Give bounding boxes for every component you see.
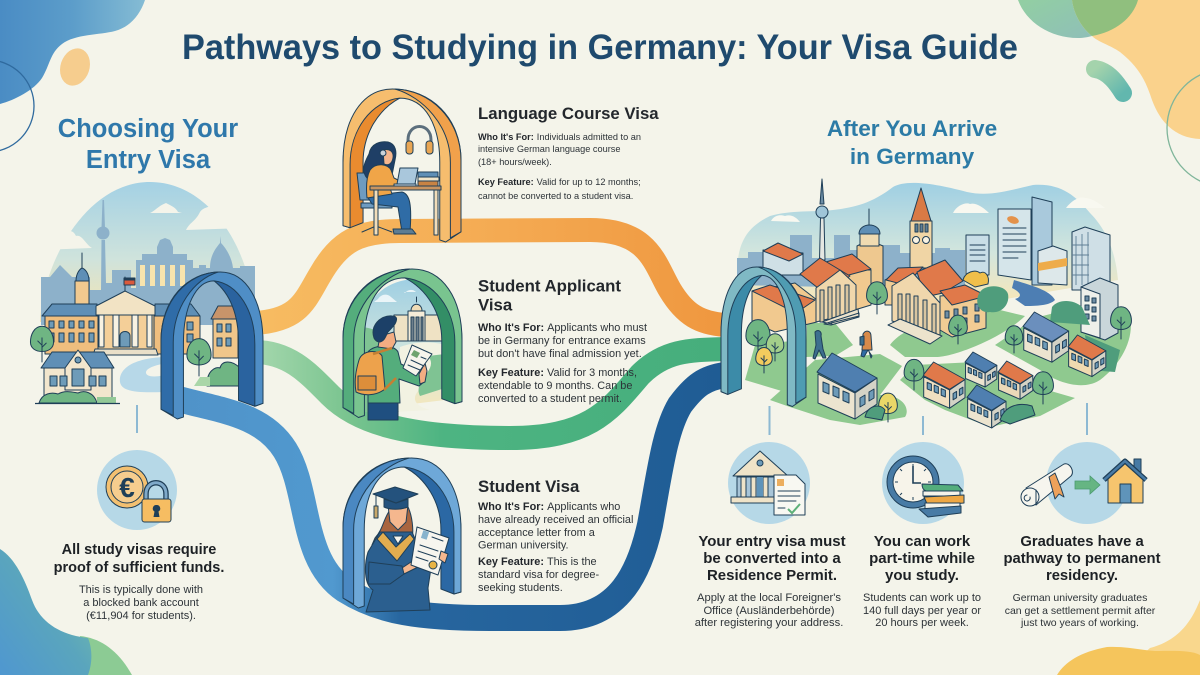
front school	[44, 367, 112, 402]
text: residence permit: be converted into a	[703, 550, 841, 567]
text: Student Applicant Visa: Who It's For:	[478, 322, 544, 334]
text: Student Visa	[478, 477, 633, 594]
arch: green	[343, 269, 462, 418]
text: permanent residency: residency.	[1046, 568, 1118, 584]
icon: euro coin and padlock	[97, 450, 177, 530]
illustration: German city campus	[737, 179, 1131, 428]
skyline silhouette	[41, 236, 255, 325]
illustration: Berlin skyline and campus	[30, 182, 256, 404]
text: Student Visa: German university.	[478, 540, 569, 552]
text: part-time work: You can work	[874, 533, 971, 550]
text: proof of funds: All study visas require	[62, 542, 216, 558]
river	[120, 357, 172, 392]
text: Student Visa: Who It's For:	[478, 501, 544, 513]
books	[418, 172, 438, 177]
text: residence permit: Office (Ausländerbehörde)	[703, 605, 835, 617]
right wing and small house	[187, 322, 193, 342]
arch: teal entry to Germany	[721, 267, 806, 406]
main university building	[45, 316, 200, 354]
text: proof of funds: This is typically done with	[79, 584, 203, 596]
connector: funds	[136, 405, 138, 433]
laptop	[397, 168, 418, 184]
trees	[30, 326, 54, 362]
text: Language Course Visa: Key Feature:	[478, 177, 534, 187]
text: residence permit: after registering your address.	[695, 617, 843, 629]
text: part-time work: 20 hours per week.	[875, 617, 969, 629]
green lawns	[770, 305, 1131, 427]
text: residence permit: Your entry visa must	[698, 533, 846, 550]
text: Student Visa: Key Feature:	[478, 556, 544, 568]
trees	[746, 320, 770, 357]
text: Language Course Visa: cannot be converted to a student visa.	[478, 191, 633, 201]
text: Student Applicant Visa: Valid for 3 months,	[547, 367, 637, 379]
text: Student Applicant Visa: Key Feature:	[478, 367, 544, 379]
text: permanent residency: can get a settlement permit after	[1005, 605, 1156, 617]
icon: euro coin and padlock: €	[119, 472, 135, 503]
right university	[885, 270, 905, 305]
TV tower	[820, 218, 825, 260]
text: permanent residency: German university graduates	[1013, 592, 1147, 604]
distant silhouettes	[737, 235, 965, 290]
text: Student Visa: standard visa for degree-	[478, 569, 599, 581]
decoration: bottom-right blob	[1057, 600, 1200, 675]
text: Student Applicant Visa: Applicants who must	[547, 322, 647, 334]
text: Student Visa: This is the	[547, 556, 597, 568]
text: part-time work: 140 full days per year or	[863, 605, 981, 617]
heading: Choosing Your Entry Visa: Entry Visa	[86, 146, 211, 174]
arch: entry arch blue	[161, 272, 263, 419]
domed tower	[857, 240, 883, 290]
text: residence permit	[695, 533, 846, 629]
text: Language Course Visa: Language Course Visa	[478, 104, 659, 123]
path: blue route	[165, 375, 725, 618]
text: Student Applicant Visa: Visa	[478, 296, 513, 314]
text: part-time work: Students can work up to	[863, 592, 981, 604]
text: Student Applicant Visa: but don't have final admission yet.	[478, 348, 642, 360]
person	[364, 142, 396, 178]
yellow shrub and bushes	[963, 271, 988, 287]
arch: orange	[343, 89, 461, 242]
decoration: top-right blobs	[1018, 0, 1200, 187]
icon: clock and books	[882, 442, 964, 524]
path: green route	[255, 349, 725, 438]
connectors: right column	[768, 403, 1088, 435]
illustration: graduate with certificate	[365, 487, 449, 612]
text: proof of funds: a blocked bank account	[83, 597, 199, 609]
text: Language Course Visa: (18+ hours/week).	[478, 157, 552, 167]
text: residence permit: Apply at the local Foreigner's	[697, 592, 841, 604]
text: Student Applicant Visa	[478, 276, 647, 405]
text: Language Course Visa	[478, 104, 659, 201]
text: Language Course Visa: Who It's For:	[478, 132, 534, 142]
headphones	[408, 126, 431, 146]
text: Student Applicant Visa: extendable to 9 months. Can be	[478, 380, 632, 392]
chair	[357, 173, 392, 208]
text: permanent residency: just two years of working.	[1020, 617, 1139, 629]
text: Student Applicant Visa: converted to a student permit.	[478, 393, 622, 405]
illustration: language student at desk	[357, 126, 441, 235]
icon: diploma arrow house	[1021, 442, 1146, 524]
text: permanent residency	[1003, 534, 1161, 629]
paper	[403, 345, 432, 376]
heading: After You Arrive in Germany: in Germany	[850, 144, 975, 169]
illustration: applicant with backpack	[355, 316, 432, 420]
text: Language Course Visa: intensive German language course	[478, 144, 620, 154]
desk	[370, 186, 441, 190]
title: Pathways to Studying in Germany: Your Visa Guide	[182, 28, 1018, 67]
text: permanent residency: pathway to permanent	[1003, 551, 1161, 567]
text: Student Visa: seeking students.	[478, 582, 563, 594]
icon: bank and document	[728, 442, 810, 524]
path: orange route	[255, 230, 725, 325]
walkers	[813, 331, 826, 359]
scene: view through green arch	[362, 279, 445, 412]
text: part-time work: part-time while	[869, 550, 975, 567]
left university	[763, 250, 803, 275]
text: Language Course Visa: Valid for up to 12 months;	[537, 177, 641, 187]
text: Student Visa: Applicants who	[547, 501, 620, 513]
arch: deep blue	[343, 458, 461, 608]
text: Student Visa: Student Visa	[478, 477, 580, 496]
heading: Choosing Your Entry Visa: Choosing Your	[58, 115, 238, 143]
text: part-time work	[863, 533, 981, 629]
decoration: bottom-left blob	[0, 549, 132, 675]
houses	[817, 353, 877, 419]
text: Student Applicant Visa: Student Applicant	[478, 276, 621, 296]
heading: After You Arrive in Germany: After You Arrive	[827, 116, 997, 141]
river	[1012, 280, 1055, 306]
decoration: top-left blob	[0, 0, 145, 152]
text: part-time work: you study.	[885, 567, 959, 584]
modern buildings	[1032, 197, 1052, 285]
clock tower	[910, 221, 932, 268]
text: Student Applicant Visa: be in Germany for entrance exams	[478, 335, 646, 347]
text: residence permit: Residence Permit.	[707, 567, 837, 584]
text: proof of funds	[54, 542, 224, 622]
text: Language Course Visa: Individuals admitted to an	[537, 132, 641, 142]
text: proof of funds: proof of sufficient funds.	[54, 560, 224, 576]
text: permanent residency: Graduates have a	[1020, 534, 1144, 550]
text: Student Visa: acceptance letter from a	[478, 527, 596, 539]
text: proof of funds: (€11,904 for students).	[86, 610, 196, 622]
backpack	[355, 351, 385, 395]
text: Student Visa: have already received an official	[478, 514, 633, 526]
